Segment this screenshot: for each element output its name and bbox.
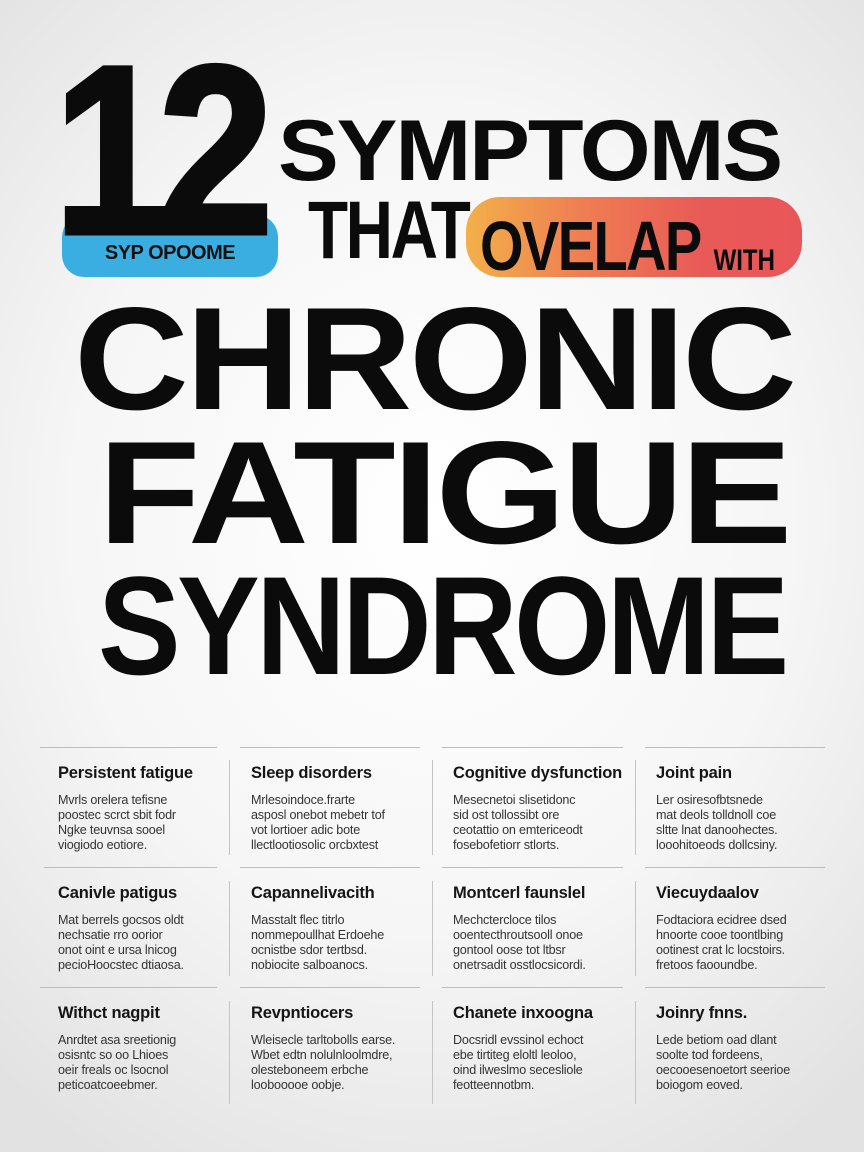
symptom 8: Fodtaciora ecidree dsed (656, 913, 787, 927)
pill text: OVELAP WITH (480, 207, 775, 285)
symptom 2: Sleep disorders (251, 764, 372, 782)
title: CHRONIC: CHRONIC (74, 277, 794, 440)
symptom 10: Wbet edtn nolulnloolmdre, (251, 1048, 392, 1062)
symptom 9: Anrdtet asa sreetionig (58, 1033, 176, 1047)
symptom 9: peticoatcoeebmer. (58, 1078, 158, 1092)
symptom 2: Mrlesoindoce.frarte (251, 793, 355, 807)
symptom 11: Docsridl evssinol echoct (453, 1033, 583, 1047)
symptom 3: ceotattio on emtericeodt (453, 823, 583, 837)
symptom 6: nobiocite salboanocs. (251, 958, 368, 972)
symptom 11: ebe tirtiteg eloltl leoloo, (453, 1048, 576, 1062)
symptom 9 (58, 1004, 176, 1092)
symptom 12: oecooesenoetort seerioe (656, 1063, 790, 1077)
symptom 4 (656, 764, 777, 852)
symptom 5 (58, 884, 184, 972)
blue pill label: SYP OPOOME (105, 242, 235, 264)
symptom 12: boiogom eoved. (656, 1078, 743, 1092)
title: THAT: THAT (308, 185, 468, 276)
symptom 9: osisntc so oo Lhioes (58, 1048, 168, 1062)
symptom 2: vot lortioer adic bote (251, 823, 360, 837)
symptom 3: Cognitive dysfunction (453, 764, 622, 782)
title: SYNDROME: SYNDROME (98, 547, 786, 704)
symptom 10 (251, 1004, 395, 1092)
symptom 12 (656, 1004, 790, 1092)
symptom 1 (58, 764, 193, 852)
symptom 9: oeir freals oc lsocnol (58, 1063, 168, 1077)
symptom 10: Revpntiocers (251, 1004, 353, 1022)
symptom 8: Viecuydaalov (656, 884, 759, 902)
symptom 5: pecioHoocstec dtiaosa. (58, 958, 184, 972)
symptom 8: fretoos faooundbe. (656, 958, 757, 972)
symptom 3: Mesecnetoi slisetidonc (453, 793, 575, 807)
symptom 5: nechsatie rro oorior (58, 928, 162, 942)
symptom 11: oind ilweslmo secesliole (453, 1063, 583, 1077)
symptom 7: onetrsadit osstlocsicordi. (453, 958, 586, 972)
symptom 4: sltte lnat danoohectes. (656, 823, 777, 837)
symptom 10: Wleisecle tarltobolls earse. (251, 1033, 395, 1047)
symptom 4: Joint pain (656, 764, 732, 782)
symptom 2: llectlootiosolic orcbxtest (251, 838, 378, 852)
symptom 1: Ngke teuvnsa sooel (58, 823, 165, 837)
symptom 6: ocnistbe sdor tertbsd. (251, 943, 367, 957)
symptom 11: feotteennotbm. (453, 1078, 534, 1092)
symptom 11: Chanete inxoogna (453, 1004, 593, 1022)
symptom 1: Mvrls orelera tefisne (58, 793, 167, 807)
symptom 7 (453, 884, 586, 972)
symptom 1: poostec scrct sbit fodr (58, 808, 176, 822)
symptom 7: Montcerl faunslel (453, 884, 585, 902)
symptom 3 (453, 764, 622, 852)
symptom 6: Masstalt flec titrlo (251, 913, 344, 927)
symptom 12: Joinry fnns. (656, 1004, 747, 1022)
symptom 11 (453, 1004, 594, 1092)
title: FATIGUE: FATIGUE (98, 411, 789, 574)
symptom 2 (251, 764, 385, 852)
symptom 4: looohitoeods dollcsiny. (656, 838, 777, 852)
symptom 2: asposl onebot mebetr tof (251, 808, 385, 822)
symptom 7: ooentecthroutsooll onoe (453, 928, 583, 942)
symptom 9: Withct nagpit (58, 1004, 160, 1022)
blue pill label (62, 215, 278, 277)
symptom 6: nommepoullhat Erdoehe (251, 928, 384, 942)
symptom 8: ootinest crat lc locstoirs. (656, 943, 785, 957)
symptom 5: Mat berrels gocsos oldt (58, 913, 184, 927)
symptom 3: fosebofetiorr stlorts. (453, 838, 559, 852)
symptom 6: Capannelivacith (251, 884, 375, 902)
symptom 8 (656, 884, 787, 972)
symptom 6 (251, 884, 384, 972)
symptom 4: Ler osiresofbtsnede (656, 793, 763, 807)
title: SYMPTOMS: SYMPTOMS (278, 103, 781, 199)
symptom 1: viogiodo eotiore. (58, 838, 147, 852)
symptom 1: Persistent fatigue (58, 764, 193, 782)
symptom 4: mat deols tolldnoll coe (656, 808, 776, 822)
symptom 5: Canivle patigus (58, 884, 177, 902)
gradient pill: OVELAP WITH (466, 197, 802, 277)
symptom 12: Lede betiom oad dlant (656, 1033, 776, 1047)
symptom 5: onot oint e ursa lnicog (58, 943, 177, 957)
title: number 12: 12 (54, 16, 263, 284)
symptom 12: soolte tod fordeens, (656, 1048, 763, 1062)
symptom 10: olesteboneem erbche (251, 1063, 368, 1077)
symptom 3: sid ost tollossibt ore (453, 808, 559, 822)
symptom 8: hnoorte cooe toontlbing (656, 928, 783, 942)
symptom 10: loobooooe oobje. (251, 1078, 344, 1092)
symptom 7: gontool oose tot ltbsr (453, 943, 566, 957)
symptom 7: Mechctercloce tilos (453, 913, 556, 927)
